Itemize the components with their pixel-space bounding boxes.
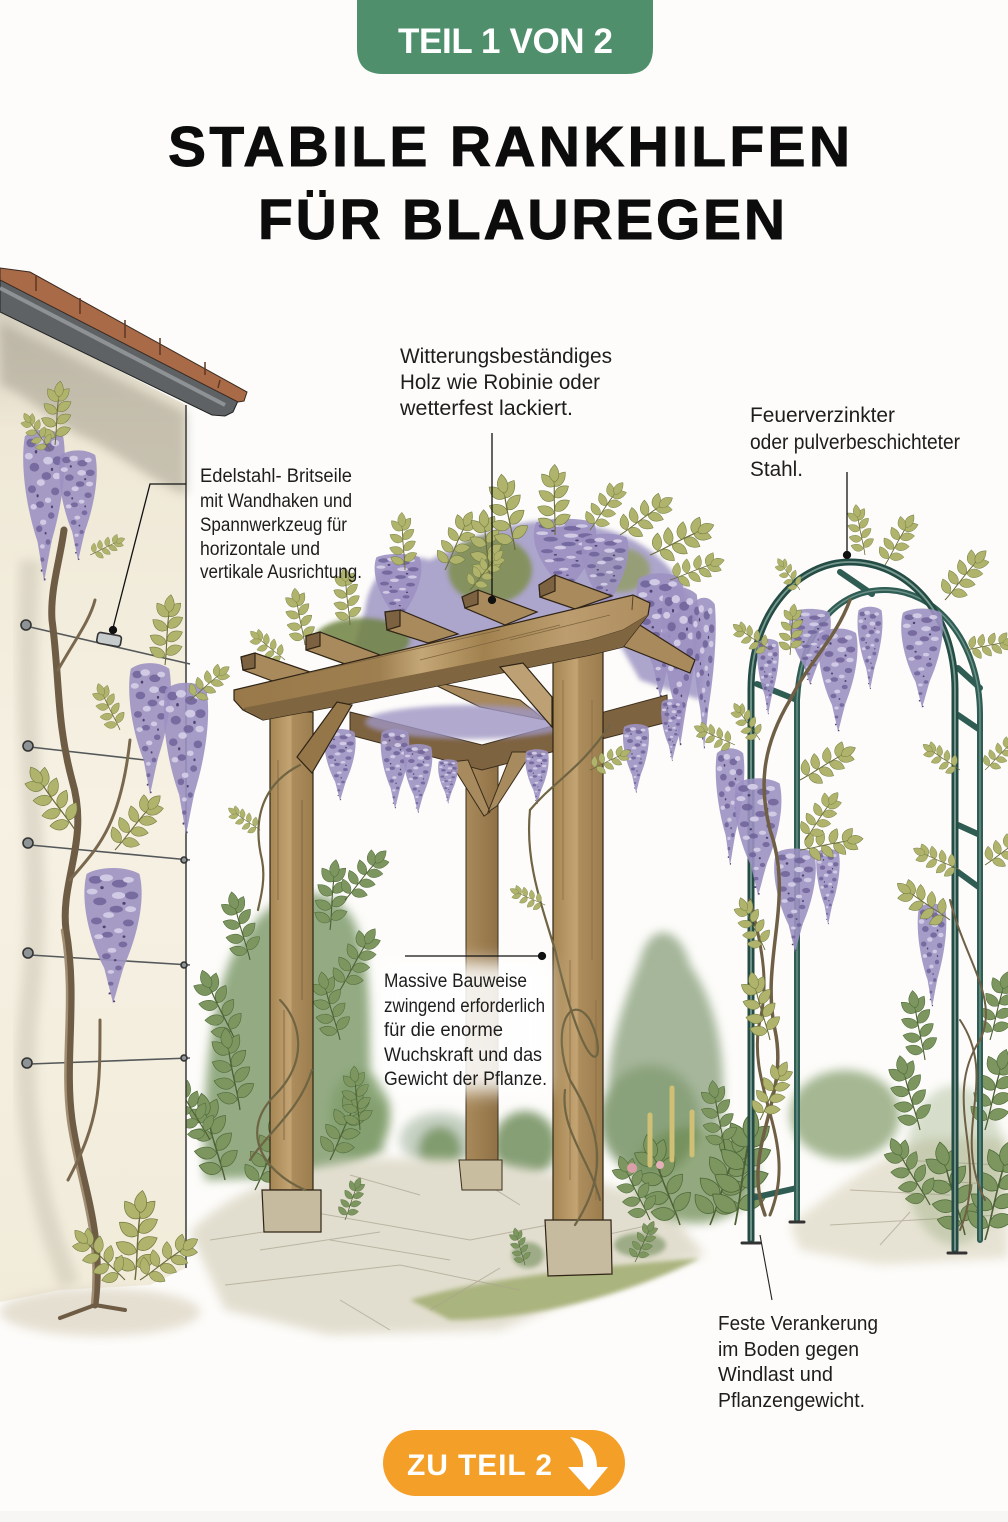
house wall with climbing wisteria <box>0 268 247 1336</box>
label: massive build: Massive Bauweise <box>384 971 527 992</box>
garden shrubs right <box>503 967 1008 1268</box>
label: massive build: Gewicht der Pflanze. <box>384 1069 547 1090</box>
label: ground anchoring: Feste Verankerung <box>718 1313 878 1335</box>
distant trees <box>204 894 900 1180</box>
label: galvanized steel: Stahl. <box>750 458 803 481</box>
icon: curved arrow <box>568 1437 608 1490</box>
leader: cables <box>110 484 186 634</box>
label: stainless steel cables: Spannwerkzeug für <box>200 515 348 536</box>
label: stainless steel cables <box>200 466 362 583</box>
background scenery: garden, shrubs and paving <box>155 838 1008 1335</box>
wisteria trunk <box>52 530 130 1318</box>
leader: anchoring <box>760 1235 772 1300</box>
title: FÜR BLAUREGEN <box>258 188 785 252</box>
braces <box>297 702 352 773</box>
label: stainless steel cables: mit Wandhaken und <box>200 491 352 512</box>
left post <box>262 712 321 1232</box>
leader: steel <box>844 472 850 558</box>
label: massive build: für die enorme <box>384 1020 503 1041</box>
title <box>168 115 850 252</box>
leader: massive build <box>405 952 546 960</box>
label: weatherproof wood: Witterungsbeständiges <box>400 345 612 368</box>
rafters <box>241 575 695 682</box>
label: ground anchoring: Windlast und <box>718 1364 833 1386</box>
main beam <box>234 595 650 720</box>
label: ground anchoring <box>718 1313 878 1412</box>
leader: wood <box>488 433 496 604</box>
button: to part 2 <box>383 1430 625 1496</box>
garden shrubs left <box>155 838 397 1223</box>
label: galvanized steel: oder pulverbeschichteter <box>750 431 960 454</box>
label: massive build: zwingend erforderlich <box>384 996 545 1017</box>
label: ground anchoring: Pflanzengewicht. <box>718 1390 865 1412</box>
label: weatherproof wood <box>399 345 612 420</box>
hanging wisteria under pergola <box>324 699 683 813</box>
label: massive build: Wuchskraft und das <box>384 1045 542 1066</box>
title: STABILE RANKHILFEN <box>168 115 850 179</box>
paving <box>190 1138 1008 1335</box>
roof with gutter <box>0 268 247 416</box>
climbing vines on pergola posts <box>222 725 635 1225</box>
text halo: massive build label <box>380 962 548 1092</box>
garden flower bed centre <box>599 1076 778 1235</box>
label: massive build <box>384 971 547 1090</box>
metal rose arch with wisteria <box>689 501 1008 1253</box>
label: galvanized steel: Feuerverzinkter <box>750 404 895 427</box>
label: galvanized steel <box>750 404 960 481</box>
label: stainless steel cables: vertikale Ausrichtung. <box>200 562 362 583</box>
pergola: front structure <box>234 575 695 1276</box>
header tab: part label: TEIL 1 VON 2 <box>398 22 613 61</box>
label: ground anchoring: im Boden gegen <box>718 1339 859 1361</box>
label: weatherproof wood: wetterfest lackiert. <box>399 397 573 420</box>
right post <box>545 648 612 1276</box>
button: to part 2: ZU TEIL 2 <box>407 1449 552 1482</box>
pergola: foliage on top <box>242 463 729 750</box>
steel cables with wall hooks <box>21 620 190 1068</box>
label: stainless steel cables: horizontale und <box>200 539 320 560</box>
label: weatherproof wood: Holz wie Robinie oder <box>400 371 600 394</box>
pergola: back post and beams <box>350 680 668 1190</box>
label: stainless steel cables: Edelstahl- Britseile <box>200 466 352 487</box>
header tab: part label <box>357 0 653 74</box>
